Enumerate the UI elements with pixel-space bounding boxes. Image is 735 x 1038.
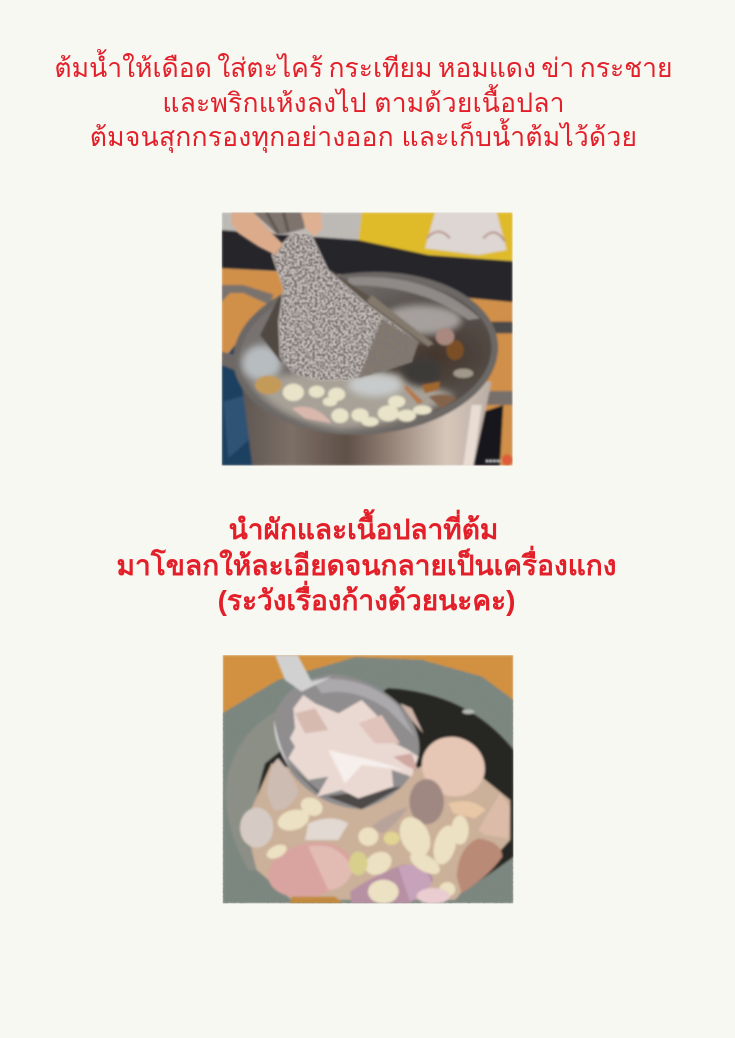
- pot body: [242, 382, 492, 466]
- black hob: [472, 404, 505, 466]
- fish skin speckle: [272, 233, 418, 380]
- heading: step two instructions: (ระวังเรื่องก้างด้วยนะคะ): [218, 585, 515, 616]
- mortar rim: [223, 657, 513, 903]
- fish tail fins: [260, 295, 283, 363]
- mortar dark interior: [255, 688, 513, 898]
- heading: step two instructions: [116, 509, 617, 616]
- table: [222, 268, 513, 466]
- left handle: [222, 285, 273, 305]
- right handles: [490, 322, 513, 333]
- pot rim: [232, 270, 500, 436]
- yellow cloth: [358, 212, 513, 261]
- heading: step one instructions: [54, 49, 673, 153]
- heading: step one instructions: และพริกแห้งลงไป ตามด้วยเนื้อปลา: [162, 88, 565, 118]
- watermark: [502, 455, 512, 465]
- fish body: [272, 233, 418, 380]
- water and debris: [242, 345, 282, 382]
- stone texture: [223, 657, 513, 903]
- spoon bowl: [273, 674, 419, 809]
- peeled shallots: [420, 734, 487, 797]
- rim highlight: [462, 709, 474, 714]
- flaked fish on spoon: [288, 695, 418, 798]
- ingredients base: [245, 750, 510, 900]
- hand: [232, 212, 283, 255]
- heading: step one instructions: ต้มจนสุกกรองทุกอย่างออก และเก็บน้ำต้มไว้ด้วย: [90, 122, 637, 152]
- fish tail held: [253, 212, 305, 235]
- wall: [222, 212, 363, 242]
- heading: step one instructions: ต้มน้ำให้เดือด ใส่ตะไคร้ กระเทียม หอมแดง ข่า กระชาย: [54, 53, 673, 83]
- heading: step two instructions: มาโขลกให้ละเอียดจนกลายเป็นเครื่องแกง: [116, 550, 617, 581]
- heading: step two instructions: นำผักและเนื้อปลาที่ต้ม: [229, 514, 498, 545]
- photo: fish and aromatics in stone mortar: [222, 655, 514, 904]
- garlic cloves: [264, 794, 469, 904]
- spoon handle: [275, 655, 332, 692]
- dark counter: [222, 230, 513, 302]
- mortar inner wall: [225, 714, 280, 870]
- blue bag: [222, 344, 255, 466]
- photo: fish lifted from boiling pot: [222, 212, 513, 466]
- table: [222, 655, 514, 714]
